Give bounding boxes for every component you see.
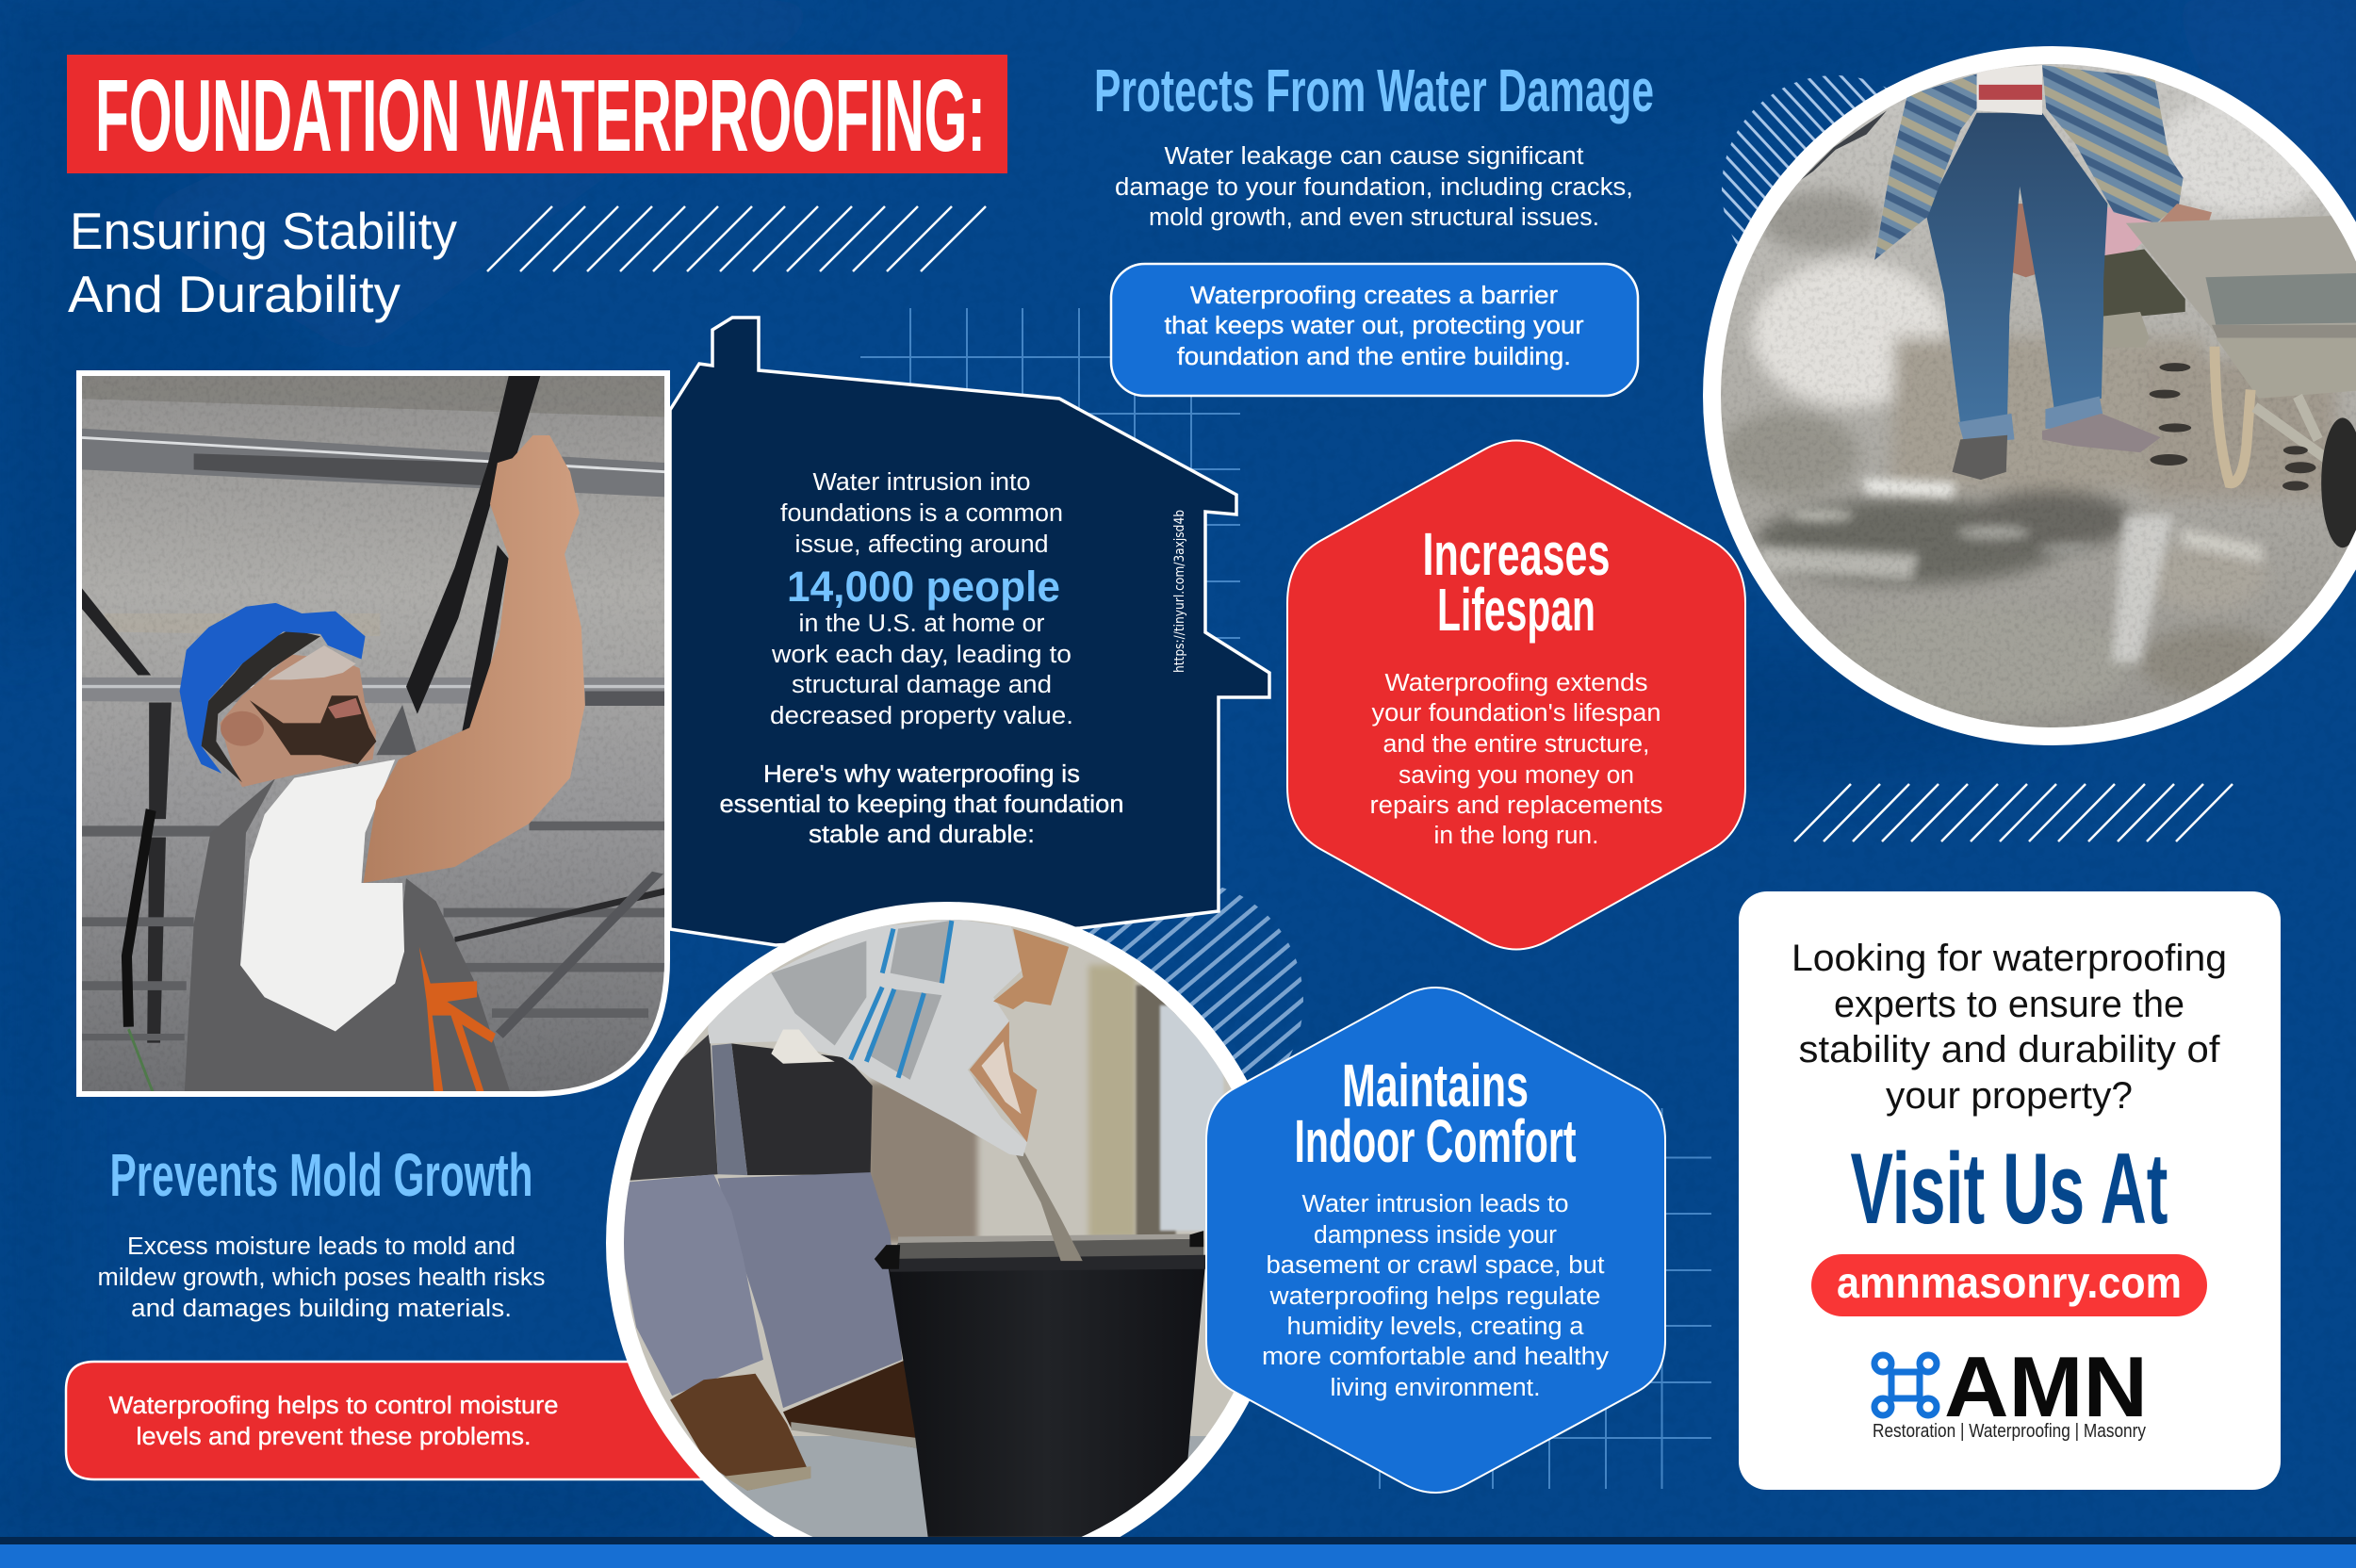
hexagon: increases lifespan: Waterproofing extends <box>1385 670 1647 696</box>
blueprint grid lower <box>1380 1108 1711 1489</box>
rails <box>82 429 666 497</box>
hexagon: maintains indoor comfort: dampness inside your <box>1314 1222 1558 1249</box>
section: protects from water damage: Protects From Water Damage <box>1094 57 1654 124</box>
cement bag <box>708 919 1027 1156</box>
logo <box>1873 1340 2148 1442</box>
neck and face <box>220 655 376 787</box>
jeans <box>1925 113 2107 424</box>
house statistic text: decreased property value. <box>770 703 1073 729</box>
blue callout: that keeps water out, protecting your <box>1165 313 1584 339</box>
lower rails <box>82 822 666 1040</box>
boots <box>783 1360 918 1448</box>
hexagon: maintains indoor comfort: more comfortable and healthy <box>1262 1344 1609 1370</box>
black beams <box>406 376 540 714</box>
section: protects from water damage: Water leakage can cause significant <box>1165 143 1583 170</box>
section: prevents mold growth: mildew growth, which poses health risks <box>98 1265 545 1291</box>
card question: experts to ensure the <box>1834 984 2184 1025</box>
lower trousers <box>718 1172 902 1408</box>
house statistic text: issue, affecting around <box>795 531 1048 558</box>
hexagon: maintains indoor comfort: Water intrusion leads to <box>1302 1191 1568 1217</box>
red callout: levels and prevent these problems. <box>136 1424 532 1450</box>
t-shirt <box>240 760 404 1032</box>
icon: command symbol <box>1874 1355 1937 1415</box>
website pill: amnmasonry.com <box>1837 1258 2182 1307</box>
wheelbarrow <box>2126 215 2356 332</box>
hexagon: maintains indoor comfort: waterproofing helps regulate <box>1268 1283 1600 1310</box>
house statistic text: in the U.S. at home or <box>799 611 1045 637</box>
house statistic text: essential to keeping that foundation <box>720 792 1123 818</box>
section: prevents mold growth: Excess moisture leads to mold and <box>127 1233 515 1260</box>
subtitle <box>68 202 457 323</box>
card question: stability and durability of <box>1798 1029 2220 1070</box>
hexagon: maintains indoor comfort: Indoor Comfort <box>1295 1107 1576 1175</box>
hexagon: increases lifespan <box>1287 441 1745 950</box>
hexagon: maintains indoor comfort: Maintains <box>1342 1052 1529 1119</box>
house statistic text: structural damage and <box>792 672 1052 698</box>
title text: FOUNDATION WATERPROOFING: <box>95 58 986 173</box>
section: protects from water damage: damage to your foundation, including cracks, <box>1115 174 1633 201</box>
red callout <box>66 1362 754 1479</box>
section: prevents mold growth <box>98 1141 545 1322</box>
concrete patches <box>1719 95 2336 719</box>
house statistic text: work each day, leading to <box>771 642 1072 668</box>
hatch accent right <box>1794 784 2233 841</box>
hexagon: increases lifespan: saving you money on <box>1399 762 1634 789</box>
hexagon: increases lifespan: and the entire structure, <box>1383 731 1649 758</box>
holes <box>2150 363 2316 491</box>
card question: your property? <box>1886 1075 2133 1117</box>
hexagon: maintains indoor comfort: humidity levels, creating a <box>1287 1314 1584 1340</box>
footer band <box>0 1537 2356 1568</box>
house statistic text: 14,000 people <box>787 563 1060 611</box>
house statistic text: stable and durable: <box>809 822 1035 848</box>
hexagon: increases lifespan: Increases <box>1423 520 1610 588</box>
house statistic text <box>720 469 1123 848</box>
crouching helper <box>2103 204 2156 255</box>
shirt <box>1974 65 2042 115</box>
section: prevents mold growth: Prevents Mold Growth <box>109 1141 533 1209</box>
card question: Looking for waterproofing <box>1792 938 2227 979</box>
photo: pouring cement into bucket <box>606 902 1250 1537</box>
title banner <box>67 55 1007 173</box>
shoes <box>1953 435 2007 480</box>
floor <box>712 1436 1235 1549</box>
hexagon: maintains indoor comfort <box>1206 988 1665 1493</box>
visit us at: Visit Us At <box>1851 1132 2168 1245</box>
card question <box>1792 938 2227 1117</box>
hexagon: increases lifespan: Lifespan <box>1437 576 1595 644</box>
section: protects from water damage: mold growth, and even structural issues. <box>1149 204 1599 231</box>
vest <box>185 778 511 1093</box>
blueprint grid upper <box>860 308 1240 660</box>
logo: Restoration | Waterproofing | Masonry <box>1873 1421 2146 1442</box>
sand stream <box>1009 1142 1083 1261</box>
hexagon: maintains indoor comfort: living environment. <box>1331 1375 1540 1401</box>
source url: https://tinyurl.com/3axjsd4b <box>1172 510 1187 673</box>
orange straps <box>419 947 496 1093</box>
hexagon: increases lifespan: in the long run. <box>1434 823 1598 849</box>
house panel <box>670 318 1269 945</box>
subtitle: And Durability <box>68 265 401 323</box>
glove <box>771 1029 835 1064</box>
decorative stripes behind lower photo <box>1064 881 1303 1120</box>
wall <box>613 905 1247 1549</box>
decorative stripes behind top photo <box>1722 75 1948 302</box>
bucket <box>889 1261 1205 1537</box>
house statistic text: foundations is a common <box>780 500 1063 527</box>
call to action card <box>1739 891 2281 1490</box>
photo: worker with wheelbarrow on wet concrete <box>1699 46 2356 749</box>
section: prevents mold growth: and damages building materials. <box>131 1296 512 1322</box>
blue callout: foundation and the entire building. <box>1177 344 1571 370</box>
hexagon: increases lifespan: your foundation's lifespan <box>1372 700 1661 727</box>
helmet <box>180 603 366 774</box>
hexagon: increases lifespan: repairs and replacements <box>1370 792 1662 819</box>
arm <box>364 435 585 883</box>
section: protects from water damage <box>1094 57 1654 396</box>
hatch accent top <box>487 206 986 271</box>
hexagon: maintains indoor comfort: basement or crawl space, but <box>1267 1252 1604 1279</box>
house statistic text: Water intrusion into <box>812 469 1031 496</box>
red callout: Waterproofing helps to control moisture <box>109 1393 558 1419</box>
subtitle: Ensuring Stability <box>70 202 457 260</box>
photo: worker installing ceiling frame <box>76 370 670 1097</box>
blue callout: Waterproofing creates a barrier <box>1190 283 1559 309</box>
blue callout <box>1111 264 1638 396</box>
dark knee panels <box>629 1034 718 1181</box>
house statistic text: Here's why waterproofing is <box>763 761 1080 788</box>
logo: AMN <box>1944 1340 2148 1435</box>
